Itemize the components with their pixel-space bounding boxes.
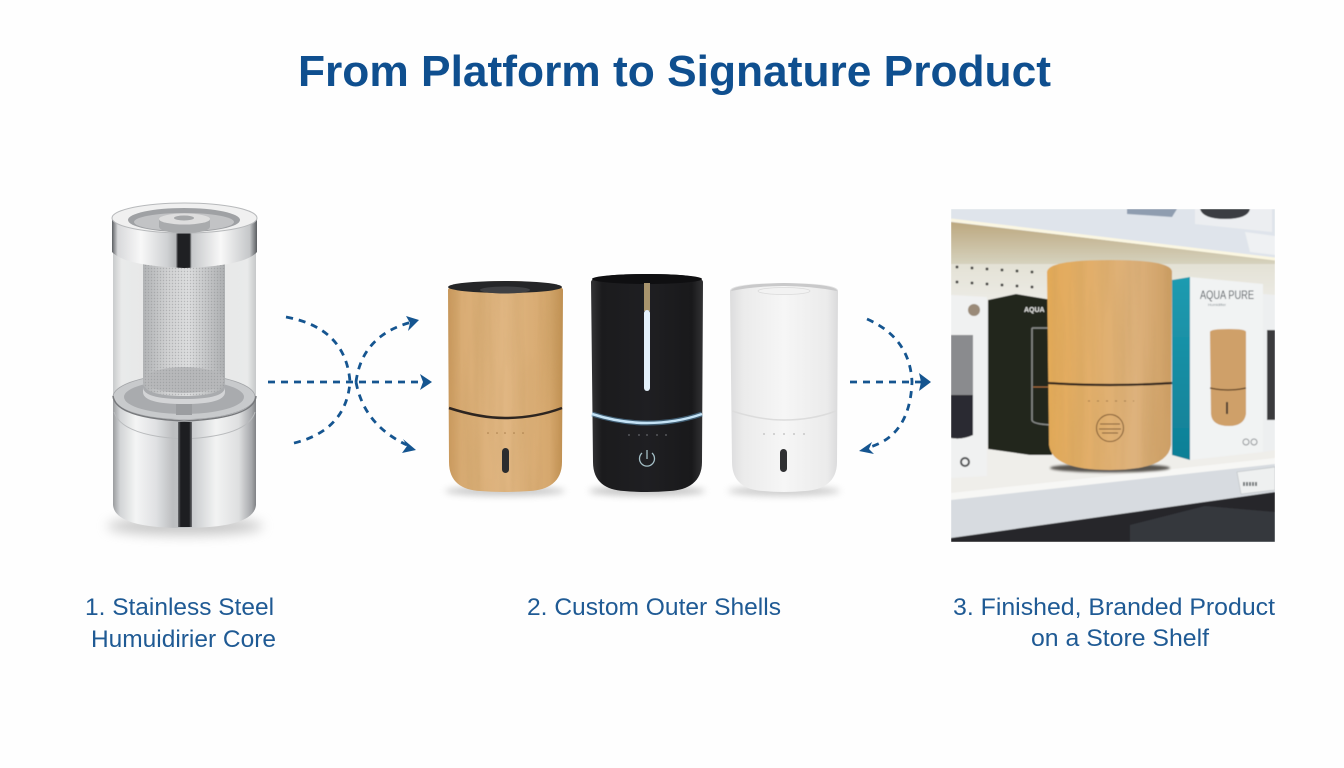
light strip [644, 310, 650, 391]
icon: black shell humidifier [589, 274, 705, 496]
inner platform [113, 374, 255, 420]
teal product box [1172, 277, 1263, 460]
water window [780, 449, 787, 472]
mesh filter [143, 260, 225, 396]
top cap [159, 219, 210, 233]
teal product box: Humidifier [1208, 302, 1227, 307]
black box [988, 294, 1052, 455]
upper shelf [951, 209, 1275, 258]
back wall under shelf [951, 222, 1275, 286]
wood humidifier on shelf [1047, 260, 1172, 472]
label: step 3: 3. Finished, Branded Product [953, 594, 1275, 621]
arrows: shells to store shelf [850, 319, 922, 447]
right edge box [1264, 294, 1275, 420]
icon: stainless steel humidifier core [107, 203, 263, 535]
label: step 1 [85, 594, 276, 653]
top steel band [112, 218, 257, 268]
title: From Platform to Signature Product [298, 47, 1051, 96]
left white box [951, 295, 987, 478]
label: step 3 [953, 594, 1275, 652]
lower steel body [113, 396, 256, 528]
label: step 3: on a Store Shelf [1031, 625, 1209, 652]
shelf surface and lip [951, 445, 1275, 497]
water window [502, 448, 509, 473]
arrows: core to shells [268, 317, 424, 445]
arrowheads: core to shells [402, 316, 432, 453]
logo stamp [1096, 414, 1124, 442]
divider band [449, 408, 562, 418]
label: step 1: Humuidirier Core [91, 626, 276, 653]
label: step 2: 2. Custom Outer Shells [527, 594, 781, 621]
glass cylinder [113, 245, 256, 400]
black box: AQUA [1024, 307, 1045, 314]
pegboard holes [956, 266, 1034, 288]
power icon [640, 450, 654, 466]
teal product box: AQUA PURE [1200, 290, 1254, 302]
arrowheads: shells to store shelf [859, 373, 931, 454]
light ring [592, 414, 702, 423]
icon: wood shell humidifier [445, 281, 565, 496]
price tag [1237, 467, 1275, 494]
icon: white shell humidifier [728, 283, 840, 496]
label: step 1: 1. Stainless Steel [85, 594, 274, 621]
photo: finished product on store shelf [951, 209, 1275, 542]
